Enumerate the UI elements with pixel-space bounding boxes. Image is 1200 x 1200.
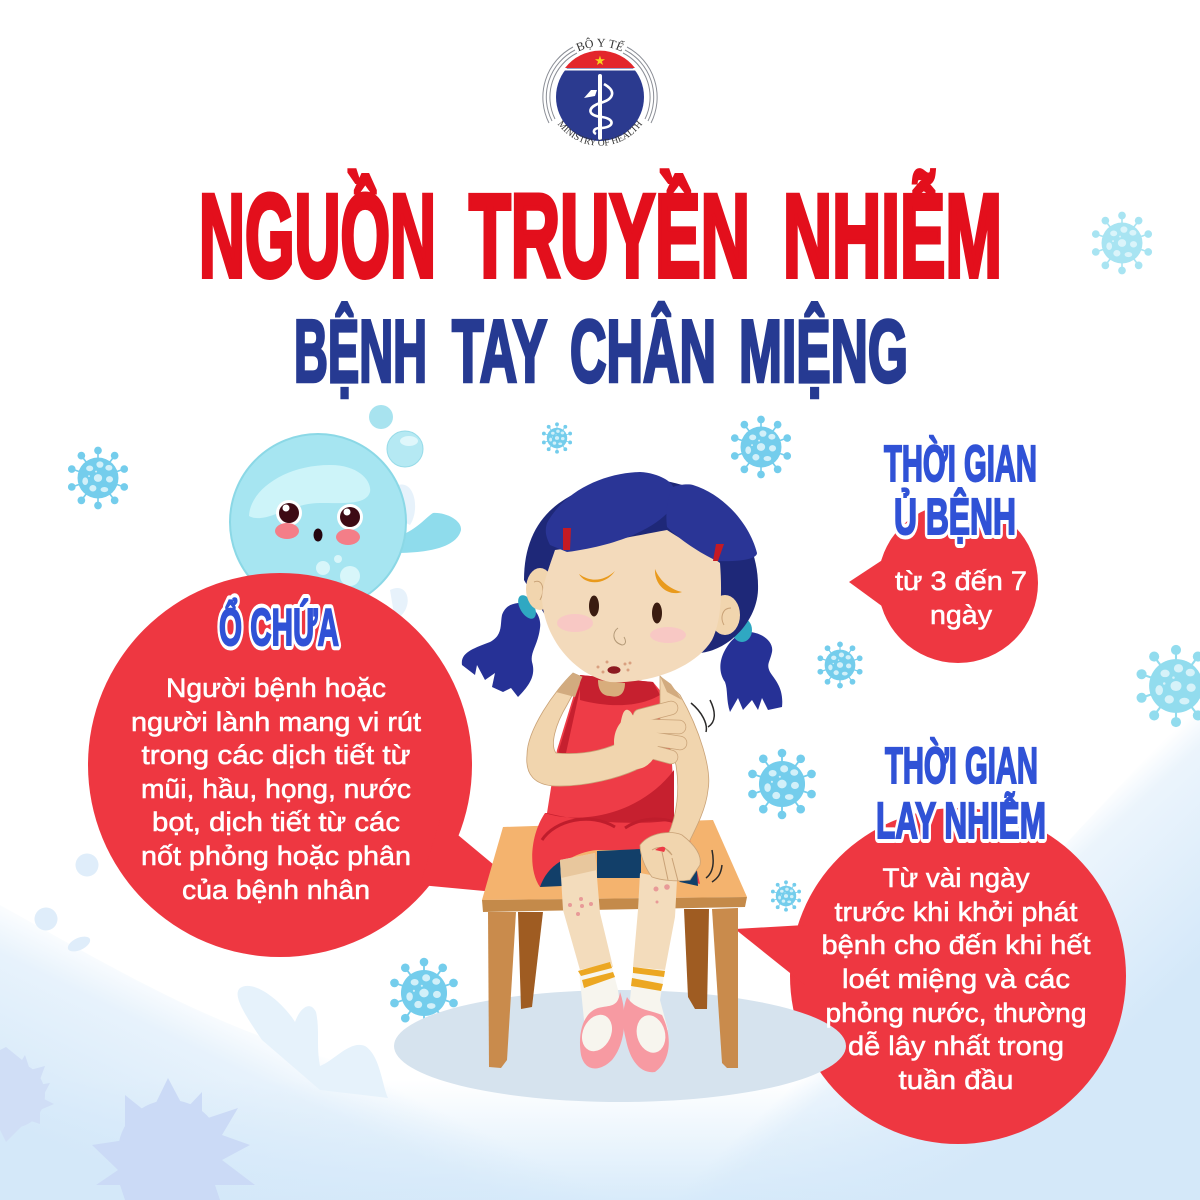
heading: thời gian ủ bệnh — [884, 435, 1037, 545]
pigtail right — [720, 632, 782, 712]
background wave: bottom band — [0, 1080, 1200, 1200]
ears — [526, 568, 740, 635]
title: TRUYỀN — [469, 170, 750, 302]
title — [199, 170, 1002, 302]
pigtail left — [462, 603, 540, 697]
hair tie right — [732, 618, 752, 642]
text: Ổ chứa: người lành mang vi rút — [131, 707, 422, 737]
dress bodice — [547, 675, 674, 823]
neck — [598, 680, 625, 697]
text: Ổ chứa: mũi, hầu, họng, nước — [141, 774, 411, 804]
girl illustration — [394, 472, 846, 1102]
hair ties — [514, 592, 540, 622]
heading: thời gian lây nhiễm: LAY NHIỄM — [876, 791, 1046, 849]
virus — [748, 749, 816, 819]
text: ủ bệnh: từ 3 đến 7 — [895, 566, 1027, 596]
virus — [1092, 212, 1152, 274]
rash spots — [568, 884, 670, 916]
skirt — [532, 813, 700, 887]
faded virus bottom centre — [92, 1078, 255, 1200]
eye right — [652, 602, 662, 624]
logo: Ministry of Health: ★ — [594, 54, 606, 69]
title: NHIỄM — [783, 170, 1002, 302]
virus — [817, 641, 863, 689]
hair clips — [563, 528, 724, 561]
text: lây nhiễm: phỏng nước, thường — [826, 998, 1086, 1028]
decorative dots — [34, 854, 98, 955]
text: Ổ chứa: Người bệnh hoặc — [166, 673, 386, 703]
logo: Ministry of Health — [542, 38, 658, 146]
heading: thời gian lây nhiễm: THỜI GIAN — [885, 737, 1038, 794]
hair top left — [546, 472, 676, 552]
faded virus bottom left — [0, 1047, 54, 1142]
virus — [731, 416, 791, 478]
heading: thời gian ủ bệnh: Ủ BỆNH — [894, 487, 1016, 545]
small bubbles — [369, 405, 423, 467]
viruses — [68, 212, 1200, 1028]
background wave: right — [640, 700, 1200, 1200]
underskirt — [540, 849, 698, 887]
virus — [1137, 645, 1200, 727]
text: ủ bệnh — [895, 566, 1027, 630]
text: lây nhiễm: bệnh cho đến khi hết — [822, 930, 1091, 960]
skirt folds — [542, 819, 675, 840]
heading: thời gian ủ bệnh: THỜI GIAN — [884, 435, 1037, 492]
text: Ổ chứa — [131, 673, 422, 905]
heading: thời gian lây nhiễm: LAY NHIỄM — [876, 791, 1046, 849]
subtitle: TAY — [452, 302, 547, 400]
text: ủ bệnh: ngày — [930, 600, 993, 630]
virus — [390, 958, 458, 1028]
scratch marks — [691, 700, 722, 882]
stool — [482, 820, 747, 1068]
subtitle: MIỆNG — [739, 302, 908, 400]
water bubble character — [230, 405, 461, 620]
red callout bubble: lây nhiễm — [735, 808, 1126, 1144]
heading: Ổ chứa: Ổ CHỨA — [219, 598, 339, 657]
heading: Ổ chứa — [219, 598, 339, 657]
hand on knee — [640, 832, 700, 881]
shoulder shade — [556, 673, 682, 700]
title: NGUỒN — [199, 170, 436, 302]
blush — [557, 614, 593, 632]
logo: Ministry of Health: BỘ Y TẾ — [576, 38, 625, 52]
text: Ổ chứa: bọt, dịch tiết từ các — [152, 807, 400, 837]
heading: Ổ chứa: Ổ CHỨA — [219, 598, 339, 657]
text: Ổ chứa: nốt phỏng hoặc phân — [141, 841, 411, 871]
legs — [560, 853, 677, 970]
virus — [68, 447, 128, 509]
arm right — [660, 676, 709, 850]
background wave: left — [0, 905, 620, 1200]
red callout bubble: Ổ chứa — [88, 573, 500, 957]
mouth — [608, 666, 620, 674]
heading: thời gian lây nhiễm — [876, 737, 1046, 849]
socks — [578, 962, 668, 1030]
face — [542, 530, 721, 682]
blush right — [650, 627, 686, 643]
virus — [542, 422, 572, 454]
virus — [771, 880, 801, 912]
text: lây nhiễm: dễ lây nhất trong — [848, 1030, 1064, 1061]
text: lây nhiễm: tuần đầu — [898, 1065, 1014, 1095]
shadow — [394, 990, 846, 1102]
hair back — [524, 479, 758, 653]
text: lây nhiễm: trước khi khởi phát — [834, 897, 1078, 927]
red callout bubble: ủ bệnh — [849, 503, 1038, 663]
text: lây nhiễm: Từ vài ngày — [882, 863, 1030, 893]
eyebrows — [579, 569, 682, 593]
subtitle: CHÂN — [570, 302, 716, 400]
bubble face — [275, 500, 363, 545]
shoes — [576, 992, 669, 1072]
text: Ổ chứa: của bệnh nhân — [182, 875, 370, 905]
text: lây nhiễm — [822, 863, 1091, 1095]
subtitle — [294, 302, 908, 400]
hand on shoulder — [614, 708, 680, 769]
decorative leaf — [238, 986, 388, 1098]
hair top right — [666, 484, 757, 561]
text: Ổ chứa: trong các dịch tiết từ — [142, 740, 410, 770]
text: lây nhiễm: loét miệng và các — [842, 964, 1070, 994]
logo: Ministry of Health: MINISTRY OF HEALTH — [558, 120, 642, 146]
nose — [614, 628, 625, 645]
arm left — [527, 673, 640, 786]
subtitle: BỆNH — [294, 302, 427, 400]
mouth spots — [596, 660, 632, 674]
eyes — [589, 596, 599, 616]
heading: thời gian ủ bệnh: Ủ BỆNH — [894, 487, 1016, 545]
